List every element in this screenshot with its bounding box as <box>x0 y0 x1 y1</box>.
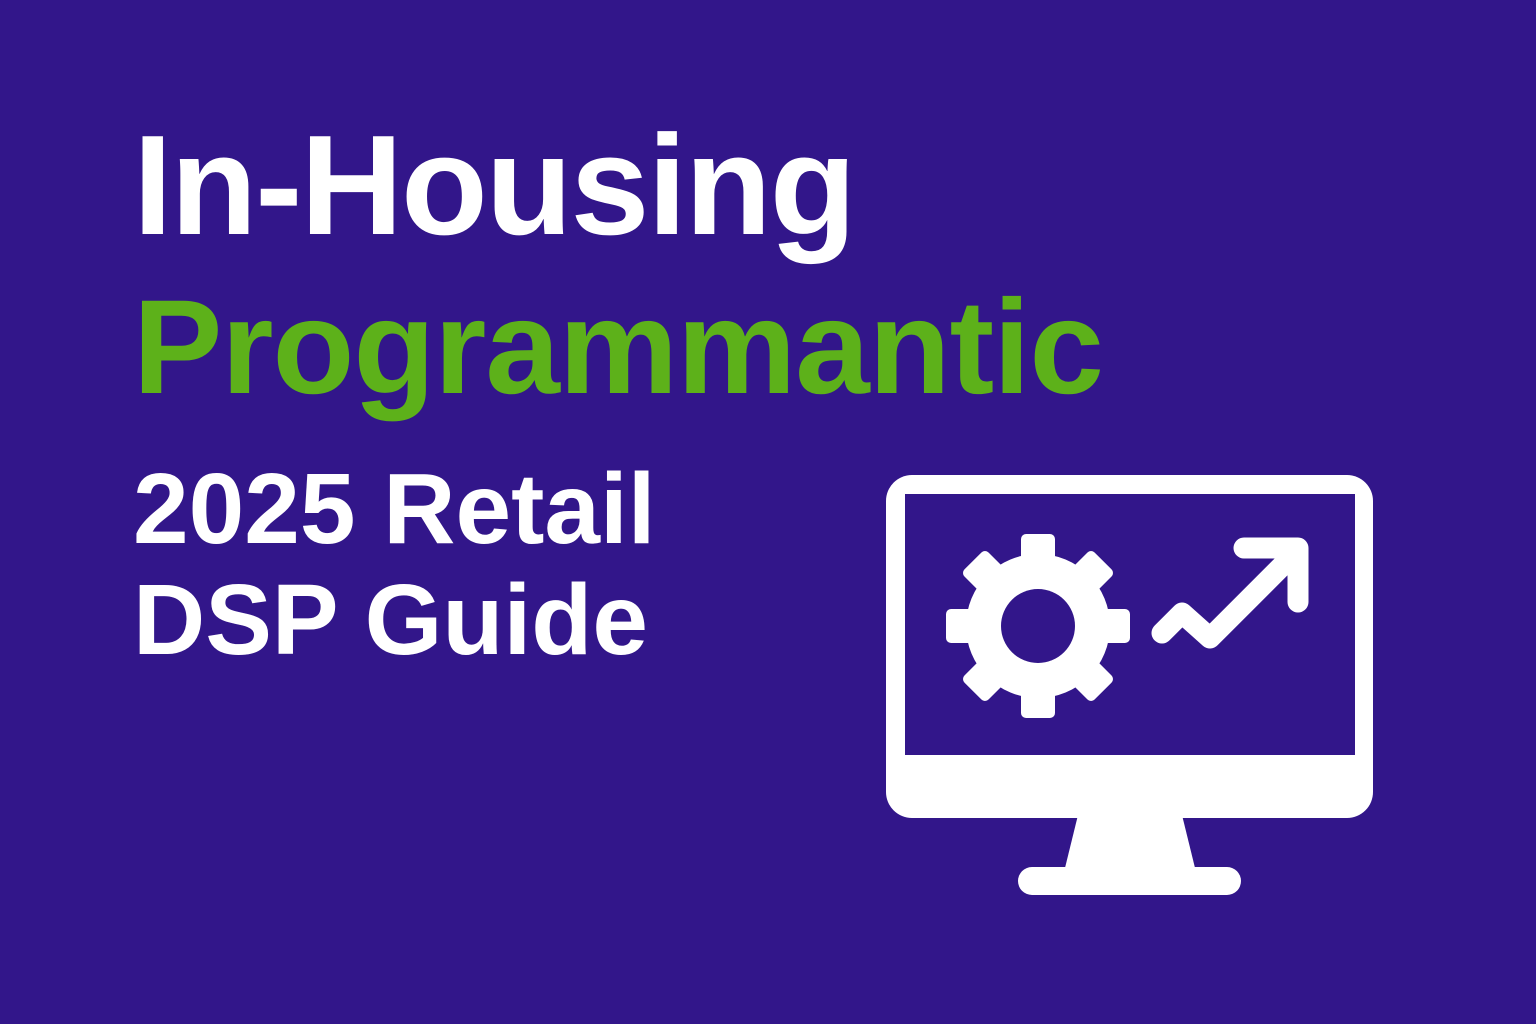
title: In-Housing: In-Housing <box>133 106 854 265</box>
title: Programmantic: Programmantic <box>133 273 1103 422</box>
subtitle: 2025 Retail: 2025 Retail <box>133 453 656 565</box>
icon: trend arrow <box>1162 548 1298 638</box>
icon: gear <box>946 534 1130 718</box>
subtitle: DSP Guide: DSP Guide <box>133 564 648 676</box>
